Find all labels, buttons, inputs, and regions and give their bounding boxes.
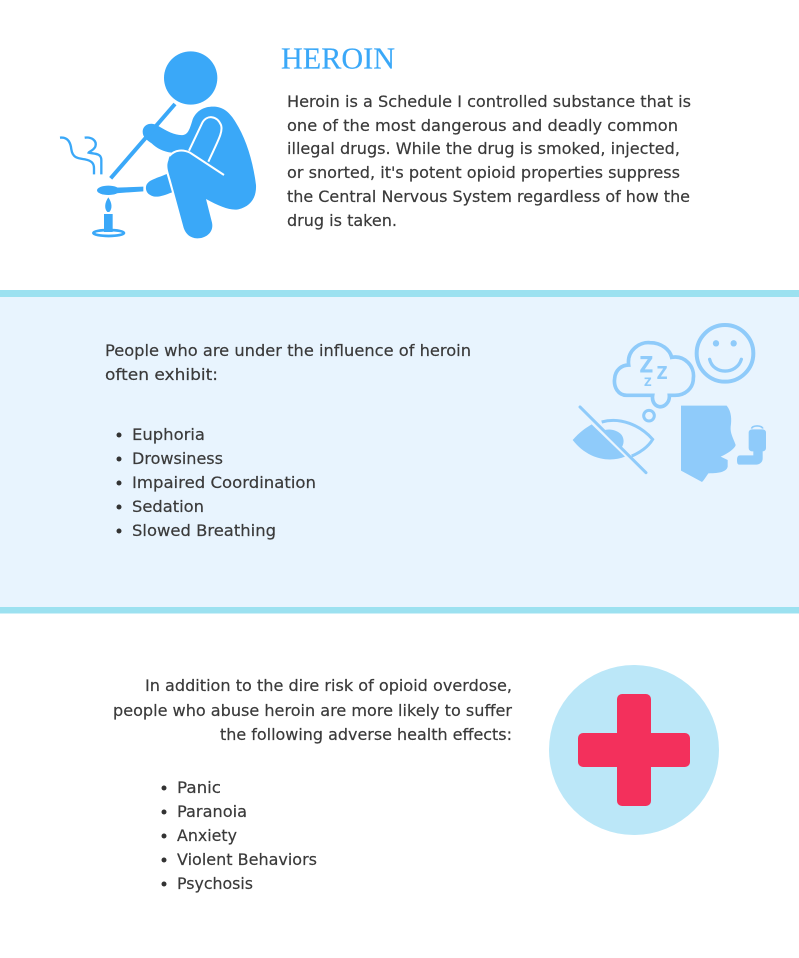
list: influence symptoms: Slowed Breathing <box>132 521 276 540</box>
text block: heroin description: illegal drugs. While the drug is smoked, injected, <box>287 139 680 158</box>
icon: sleep thought bubble: Z <box>639 354 653 379</box>
icon: crossed-out eye <box>573 407 653 473</box>
list: adverse health effects: Paranoia <box>177 802 247 821</box>
list: adverse health effects: Violent Behaviors <box>177 850 317 869</box>
text block: adverse effects intro: people who abuse heroin are more likely to suffer <box>113 701 512 720</box>
text block: influence intro <box>105 341 471 384</box>
title: HEROIN <box>281 40 395 76</box>
icon: sleep thought bubble: Z <box>657 364 668 384</box>
icon group: effects of heroin <box>573 325 766 482</box>
panel: effects under the influence <box>0 290 799 614</box>
list: influence symptoms <box>116 425 316 540</box>
text block: heroin description: Heroin is a Schedule I controlled substance that is <box>287 92 691 111</box>
icon: face inhaling <box>681 406 766 482</box>
list: adverse health effects: Psychosis <box>177 874 253 893</box>
text block: heroin description <box>287 92 691 230</box>
icon: smiley face <box>697 325 753 382</box>
list: influence symptoms: Impaired Coordination <box>132 473 316 492</box>
list: adverse health effects: Panic <box>177 778 221 797</box>
icon: sleep thought bubble: Z <box>644 375 652 389</box>
list: influence symptoms: Sedation <box>132 497 204 516</box>
text block: influence intro: People who are under the influence of heroin <box>105 341 471 360</box>
text block: heroin description: or snorted, it's potent opioid properties suppress <box>287 163 680 182</box>
text block: heroin description: the Central Nervous System regardless of how the <box>287 187 690 206</box>
icon: person heating heroin on a spoon <box>60 51 256 238</box>
list: adverse health effects: Anxiety <box>177 826 237 845</box>
text block: adverse effects intro <box>113 676 512 744</box>
list: adverse health effects <box>162 778 317 893</box>
text block: adverse effects intro: In addition to the dire risk of opioid overdose, <box>145 676 512 695</box>
text block: adverse effects intro: the following adverse health effects: <box>220 725 512 744</box>
list: influence symptoms: Euphoria <box>132 425 205 444</box>
text block: influence intro: often exhibit: <box>105 365 218 384</box>
list: influence symptoms: Drowsiness <box>132 449 223 468</box>
text block: heroin description: one of the most dangerous and deadly common <box>287 116 678 135</box>
icon: sleep thought bubble <box>614 343 694 421</box>
icon: medical cross <box>549 665 719 835</box>
text block: heroin description: drug is taken. <box>287 211 397 230</box>
